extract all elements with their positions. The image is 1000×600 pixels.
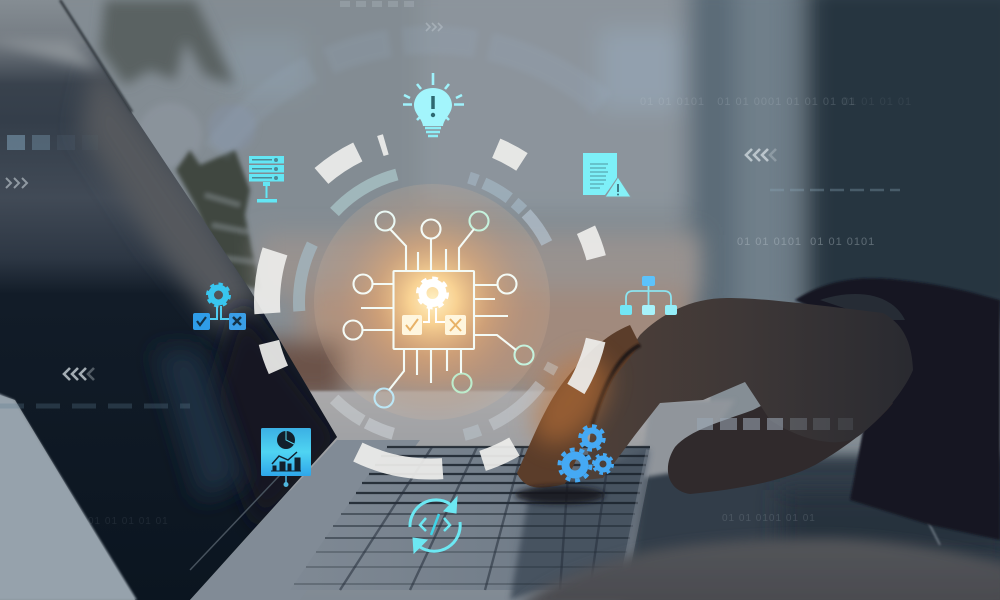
binary text far right: 01 01 01 01	[843, 96, 912, 108]
laptop palm rest: dark lower area	[620, 455, 1000, 600]
shadow under fingers	[515, 486, 605, 504]
dash row on hand	[697, 418, 853, 430]
blurred office wall and columns	[0, 0, 1000, 320]
foreground blurred arm	[515, 538, 1000, 600]
chevrons right	[746, 149, 776, 161]
chevrons far left	[6, 178, 27, 188]
icon: three gears	[560, 426, 612, 480]
cross box	[445, 315, 466, 335]
orange light spill on fingers	[517, 342, 623, 458]
circuit traces	[361, 229, 516, 390]
icon: hierarchy	[620, 276, 677, 315]
binary text middle right: 01 01 0101 01 01 0101	[737, 236, 875, 248]
check box	[402, 315, 422, 335]
overlay: binary digits, chevrons and dashes	[0, 4, 912, 527]
binary text lower right: 01 01 0101 01 01	[722, 513, 816, 524]
icon: lightbulb	[403, 73, 464, 136]
circuit nodes	[344, 212, 534, 408]
central chip circuit icon	[344, 212, 534, 408]
finger shadow separation	[592, 345, 640, 425]
icon: server	[249, 156, 284, 202]
back of hand	[585, 298, 913, 480]
large faint outer ring	[169, 40, 693, 564]
keyboard keys	[290, 447, 650, 600]
thin lid edge line	[60, 0, 132, 112]
laptop base	[190, 440, 420, 600]
icon: gear with check and cross	[193, 284, 246, 330]
warm band behind the hub	[255, 235, 700, 400]
dash row left top	[7, 135, 98, 150]
palm rest dark right	[780, 490, 1000, 560]
binary text upper right: 01 01 0101 01 01 0001 01 01 01 01	[640, 96, 855, 108]
icon: code sync	[410, 497, 460, 553]
icon: chart presentation	[261, 428, 311, 487]
sleeve	[795, 278, 1000, 540]
dash row right	[770, 189, 900, 191]
binary text lower left: 01 01 01 01 01	[88, 516, 169, 527]
lower finger and palm	[668, 360, 893, 494]
chevrons top	[426, 23, 442, 31]
desk	[290, 391, 710, 600]
dash row top	[340, 1, 420, 7]
blurred dark plant top	[100, 0, 235, 85]
laptop palm rest: light strip between keyboard and hand	[640, 400, 735, 478]
chevrons left	[64, 368, 94, 380]
chip body	[394, 271, 474, 349]
left finger	[517, 325, 640, 488]
pale blobs near the plant	[138, 103, 256, 167]
trackpad edge	[916, 498, 940, 545]
chip gear	[418, 278, 447, 322]
icon: document with warning	[583, 153, 631, 197]
sleeve cuff highlight	[820, 294, 905, 320]
outer white ring segments	[260, 131, 602, 473]
light triangle bottom-left	[0, 392, 137, 600]
inner ring segments	[294, 165, 568, 439]
dash row left lower	[0, 404, 190, 408]
plant leaves	[176, 150, 262, 290]
central glow disc	[314, 182, 551, 420]
lid of laptop, dark blurred reflection	[0, 0, 345, 600]
